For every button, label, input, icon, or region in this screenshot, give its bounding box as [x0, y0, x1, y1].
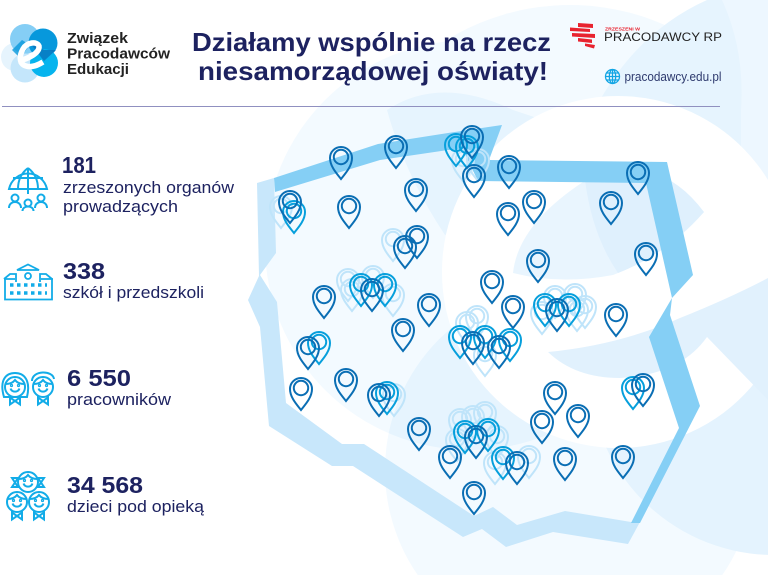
divider: [2, 106, 720, 108]
stat: schools: 338: [63, 258, 105, 284]
stat: organs: 181: [62, 152, 96, 178]
background circles: [266, 0, 768, 575]
icon: umbrella with people: [9, 168, 47, 211]
stat: schools: szkół i przedszkoli: [63, 283, 204, 302]
map outline: dark band north-east: [274, 125, 700, 523]
stat: staff: [2, 365, 172, 409]
logo: Związek Pracodawców Edukacji: [1, 24, 171, 82]
stat: organs: prowadzących: [63, 197, 178, 216]
stat: children: 34 568: [67, 472, 143, 498]
logo: Pracodawcy RP: PRACODAWCY RP: [604, 30, 722, 44]
logo: Pracodawcy RP: ZRZESZENI W: [605, 26, 641, 32]
icon: three children: [7, 472, 49, 520]
dark location pins: [279, 126, 657, 514]
stat: staff: 6 550: [67, 365, 131, 391]
title: Działamy wspólnie na rzecz: [192, 27, 551, 57]
icon: school building: [4, 264, 53, 300]
logo: Związek Pracodawców Edukacji: Związek: [67, 31, 129, 47]
logo: Pracodawcy RP: [570, 23, 722, 48]
icon: two employees: [2, 372, 54, 404]
stat: organs: zrzeszonych organów: [63, 178, 235, 197]
stat: children: dzieci pod opieką: [67, 497, 205, 516]
stat: organs: [9, 152, 235, 216]
stat: staff: pracowników: [67, 390, 172, 409]
stat: children: [7, 472, 205, 520]
logo: Związek Pracodawców Edukacji: Pracodawców: [67, 46, 171, 62]
title: niesamorządowej oświaty!: [198, 56, 548, 86]
faded location pins: [270, 149, 596, 484]
stat: schools: [4, 258, 204, 302]
website link with globe icon: pracodawcy.edu.pl: [624, 70, 722, 84]
map outline: light band south-west: [248, 178, 640, 547]
logo: Związek Pracodawców Edukacji: Edukacji: [67, 62, 129, 78]
medium location pins: [283, 134, 644, 479]
title: [192, 27, 551, 86]
